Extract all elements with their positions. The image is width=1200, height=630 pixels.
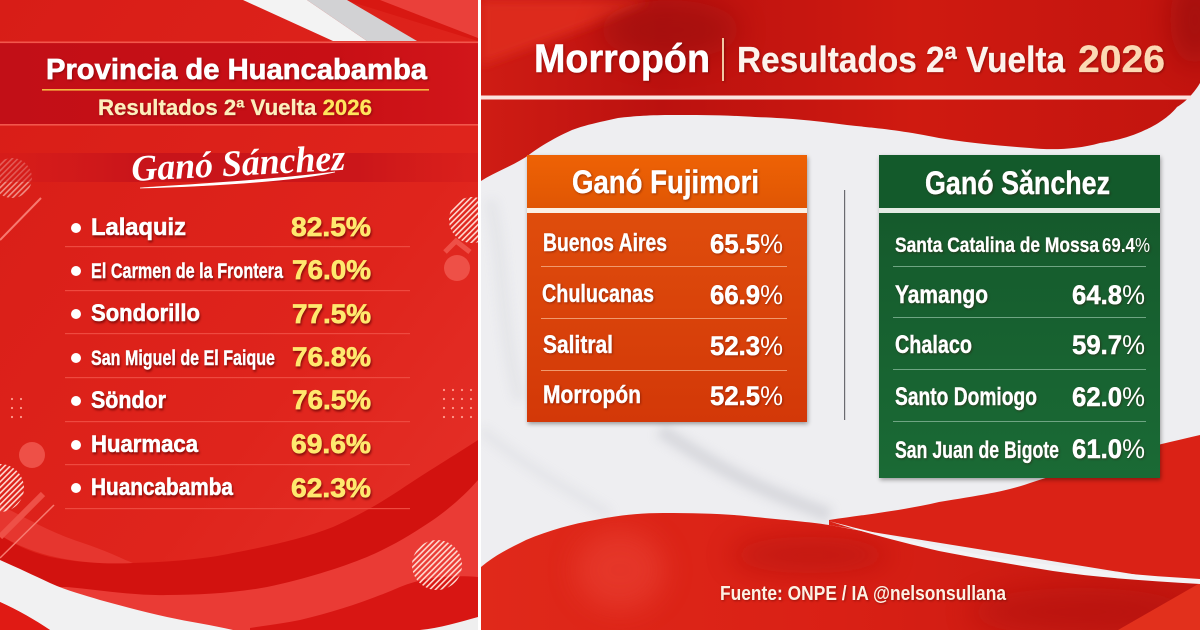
row: Huarmaca: Huarmaca <box>91 431 199 458</box>
row: Buenos Aires: 65.5% <box>710 229 783 259</box>
row: Salitral: 52.3% <box>710 331 783 361</box>
row: Salitral <box>543 334 784 358</box>
row: Sondorillo <box>65 303 410 334</box>
title: Provincia de Huancabamba <box>46 54 428 86</box>
white cloth folds <box>658 426 832 521</box>
divider between panels <box>844 190 845 420</box>
row: Söndor: 76.5% <box>292 385 371 415</box>
row: Yamango <box>895 285 1146 310</box>
background waves <box>0 440 478 630</box>
row: Huancabamba: Huancabamba <box>91 474 234 501</box>
panel: Ganó Fujimori <box>527 155 807 422</box>
row: Sondorillo: Sondorillo <box>91 300 200 327</box>
panel: Morropón <box>481 0 1200 630</box>
decorations <box>0 158 495 590</box>
title: Resultados 2ª Vuelta <box>737 39 1066 80</box>
top red cloth <box>481 0 1200 181</box>
header banner <box>0 42 478 126</box>
bottom red cloth <box>481 435 1200 630</box>
row: Chulucanas: Chulucanas <box>542 280 654 308</box>
band: Ganó Sánchez: Ganó Sánchez <box>130 138 347 190</box>
row: El Carmen de la Frontera <box>65 260 410 292</box>
row: Santo Domiogo: Santo Domiogo <box>895 383 1037 411</box>
row: Santa Catalina de Mossa: 69.4% <box>1102 235 1150 257</box>
row: Chalaco: 59.7% <box>1072 330 1145 360</box>
subtitle: Resultados 2ª Vuelta 2026 <box>98 95 372 120</box>
list: districts <box>65 212 410 509</box>
row: San Juan de Bigote: 61.0% <box>1072 434 1145 464</box>
heading: Ganó Sǎnchez <box>925 165 1110 201</box>
row: Yamango: 64.8% <box>1072 280 1145 310</box>
row: Söndor <box>65 390 410 422</box>
row: Yamango: Yamango <box>895 281 988 309</box>
panel: Ganó Sánchez <box>879 155 1160 478</box>
row: Huarmaca: 69.6% <box>291 429 371 459</box>
row: Buenos Aires: Buenos Aires <box>543 229 667 257</box>
row: El Carmen de la Frontera: 76.0% <box>292 255 371 285</box>
row: Morropón: Morropón <box>543 381 641 409</box>
heading: Ganó Fujimori <box>572 164 759 200</box>
row: San Miguel de El Faique: 76.8% <box>292 342 371 372</box>
row: Sondorillo: 77.5% <box>292 299 371 329</box>
row: Söndor: Söndor <box>91 387 166 414</box>
band: Ganó Sánchez <box>0 146 446 188</box>
row: El Carmen de la Frontera: El Carmen de la Frontera <box>91 260 283 283</box>
row: Santo Domiogo <box>895 386 1146 412</box>
row: Santo Domiogo: 62.0% <box>1072 382 1145 412</box>
row: Huancabamba: 62.3% <box>291 473 371 503</box>
footer source: Fuente: ONPE / IA @nelsonsullana <box>720 583 1007 605</box>
row: Lalaquiz: Lalaquiz <box>91 214 186 241</box>
row: San Juan de Bigote: San Juan de Bigote <box>895 437 1059 464</box>
row: Chalaco: Chalaco <box>895 331 972 359</box>
row: Huancabamba <box>65 477 410 510</box>
top flag ribbon <box>243 0 478 41</box>
row: Chulucanas: 66.9% <box>710 280 783 310</box>
row: Huarmaca <box>65 434 410 466</box>
row: Chalaco <box>896 334 1146 356</box>
row: Chulucanas <box>542 284 784 306</box>
row: Lalaquiz: 82.5% <box>291 212 371 242</box>
row: Salitral: Salitral <box>543 331 613 359</box>
title <box>534 37 1165 81</box>
title: 2026 <box>1078 39 1165 81</box>
row: Buenos Aires <box>544 232 784 256</box>
row: Santa Catalina de Mossa: Santa Catalina de Mossa <box>895 234 1099 257</box>
row: San Miguel de El Faique <box>65 346 410 378</box>
panel: Huancabamba <box>0 0 495 630</box>
row: Morropón <box>544 384 784 410</box>
title: Morropón <box>534 37 710 81</box>
row: Lalaquiz <box>65 216 410 248</box>
row: San Miguel de El Faique: San Miguel de El Faique <box>91 347 275 370</box>
row: Morropón: 52.5% <box>710 381 783 411</box>
